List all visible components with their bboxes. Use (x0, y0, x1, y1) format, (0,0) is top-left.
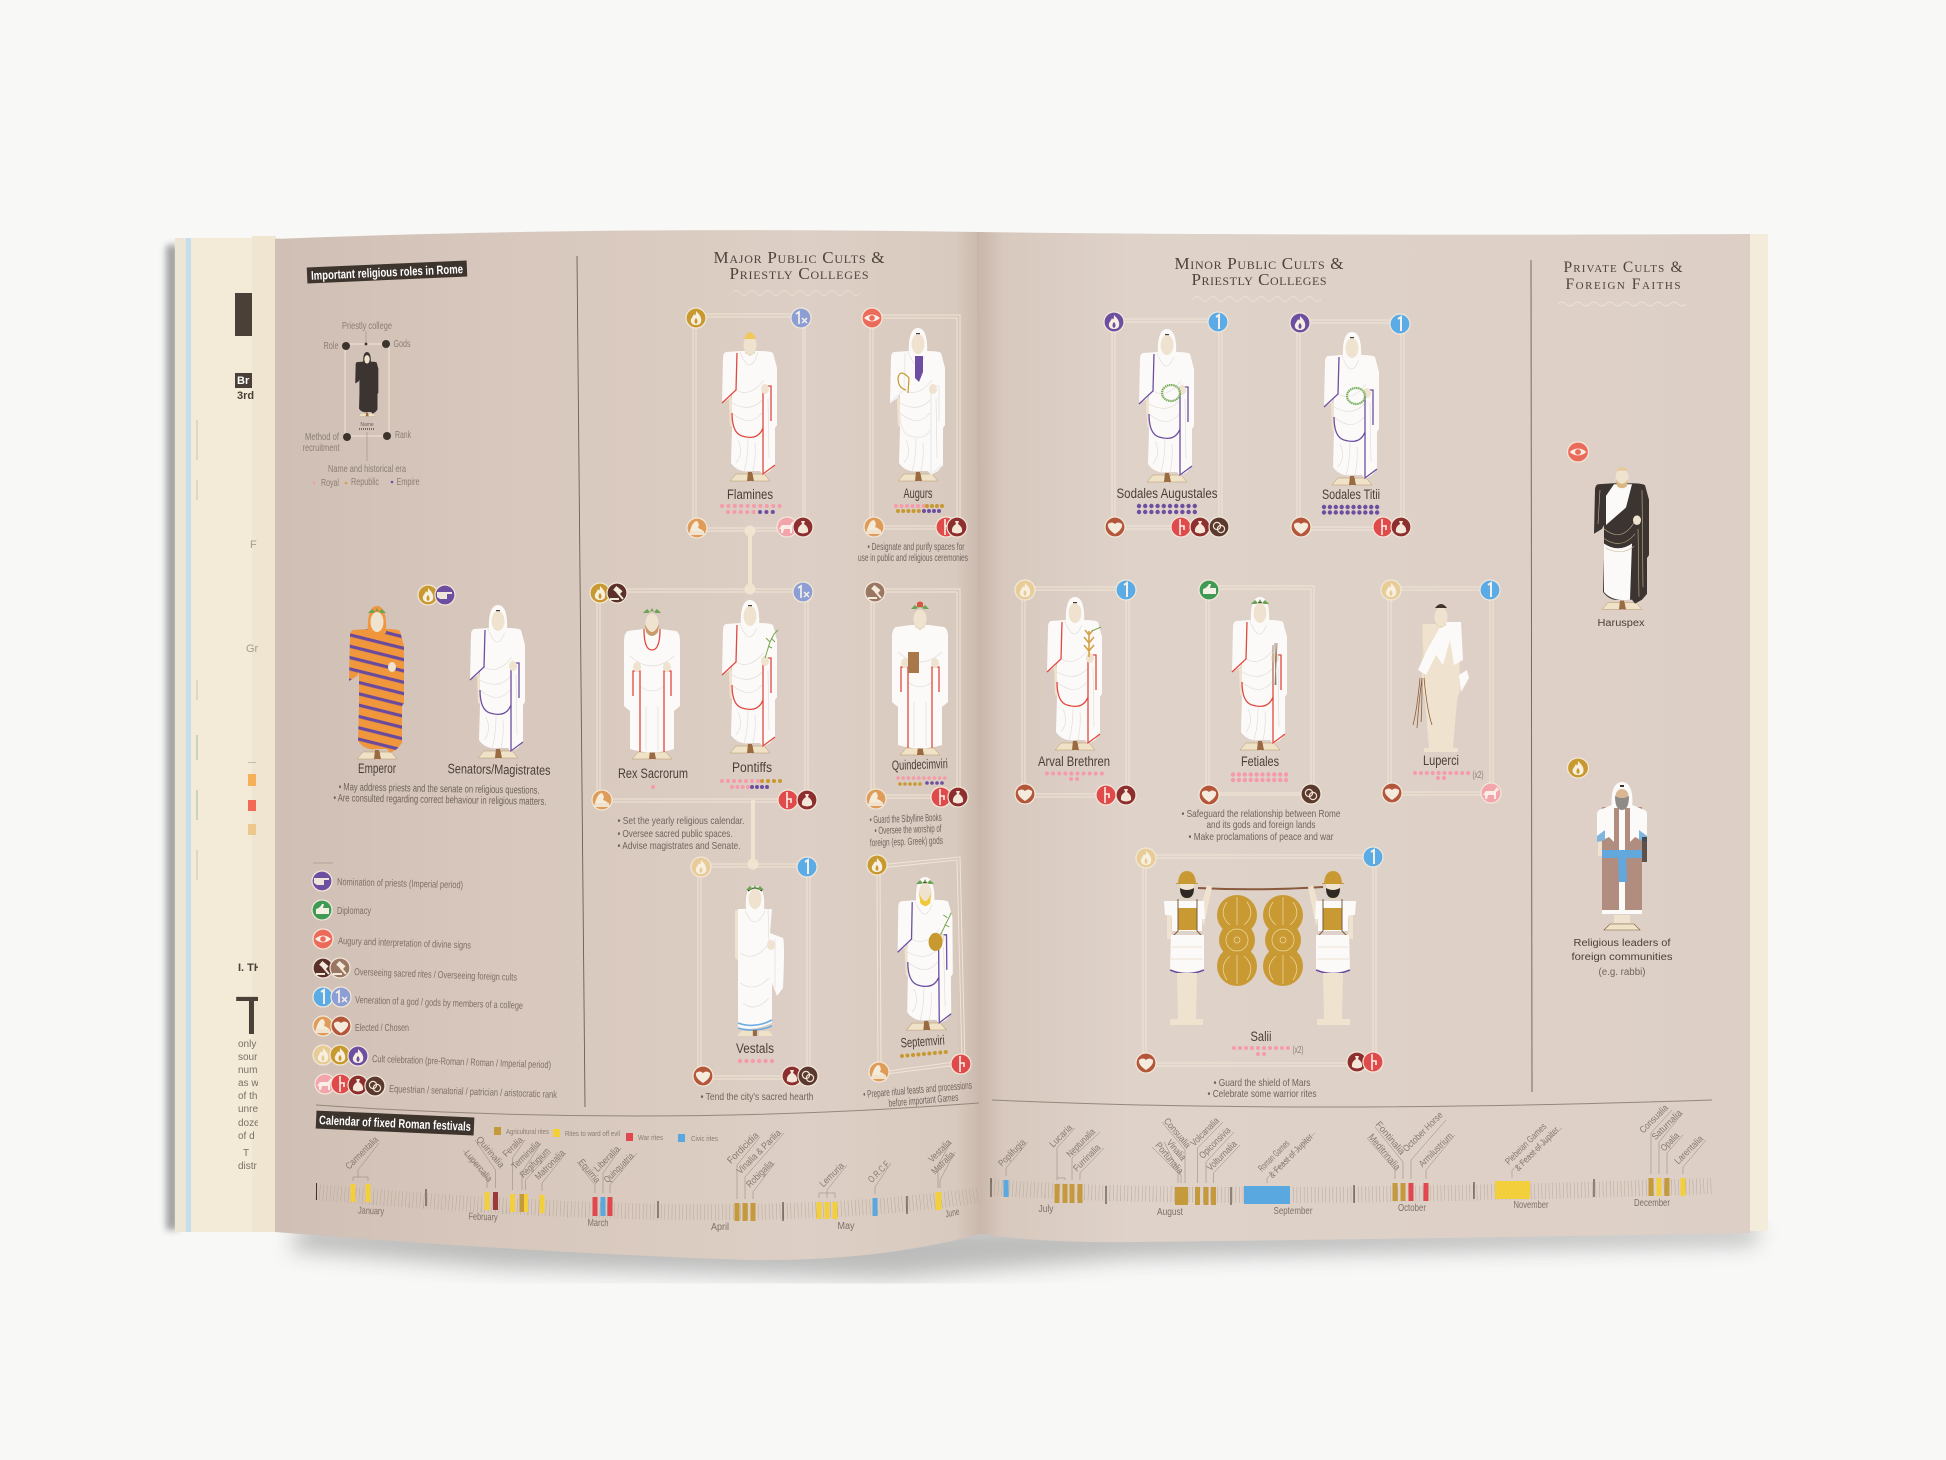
festival names: Consualia (1161, 1116, 1193, 1151)
era dots (896, 506, 943, 511)
figure (1047, 597, 1102, 750)
panel: Sodales Augustales (1104, 312, 1229, 537)
legend row: nomination: Nomination of priests (Imperial period) (337, 877, 463, 891)
festival names: Vinalia & Parilia (735, 1127, 784, 1177)
calendar title (316, 1111, 474, 1135)
festival bars (1004, 1178, 1686, 1205)
description: before important Games (888, 1092, 959, 1110)
festival names: Portunalia (1152, 1140, 1186, 1177)
legend row: overseeing (313, 958, 517, 984)
era dots (1234, 1048, 1289, 1054)
previous page fragments: T (235, 986, 268, 1046)
figure: Emperor (349, 606, 404, 759)
festival names: Poplifugia (996, 1137, 1029, 1169)
icons (1104, 312, 1229, 537)
festival names: Volturnalia (1205, 1138, 1240, 1174)
panel: Religious leaders (1568, 758, 1672, 978)
calendar timeline: January to June (316, 1127, 979, 1233)
description: • Safeguard the relationship between Rome (1182, 808, 1341, 820)
previous page fragments: distr (238, 1161, 258, 1172)
frame (1388, 587, 1493, 795)
role key diagram: Gods (394, 339, 410, 350)
month labels: July (1038, 1204, 1054, 1215)
festival names: Furrinalia (1071, 1142, 1104, 1174)
era dots (1415, 773, 1469, 778)
icons (590, 582, 817, 810)
role key diagram (302, 321, 420, 489)
festival names: Regifugium (518, 1146, 553, 1181)
era dots (651, 781, 782, 789)
description: • Advise magistrates and Senate. (618, 840, 740, 852)
key figure (355, 352, 378, 416)
legend row: augury: Augury and interpretation of divine signs (338, 936, 471, 952)
festival names: Opiconsivia (1197, 1125, 1234, 1161)
day ticks (991, 1186, 1712, 1195)
festival names: Carmentalia (343, 1134, 381, 1172)
description (858, 541, 968, 564)
previous page fragments: Br (237, 375, 250, 387)
month labels: October (1398, 1203, 1427, 1214)
name: foreign communities (1572, 952, 1672, 963)
previous page fragments: sour (238, 1052, 258, 1063)
frame (597, 589, 808, 802)
name: (e.g. rabbi) (1598, 967, 1646, 978)
description (333, 781, 547, 808)
previous page fragments: doze (238, 1118, 260, 1129)
legend row: augury (313, 929, 471, 952)
description (869, 812, 943, 849)
panel: Septemviri (863, 855, 973, 1112)
month labels (358, 1206, 961, 1233)
month labels: April (711, 1222, 729, 1233)
icons (1290, 313, 1411, 537)
figure: Pontiff (722, 600, 778, 753)
calendar legend: Agricultural rites (506, 1129, 549, 1136)
figure (1413, 604, 1469, 752)
name: Senators: Senators/Magistrates (447, 761, 551, 778)
previous page fragments (235, 293, 258, 1169)
legend row: diplomacy (312, 900, 371, 920)
frame (870, 315, 960, 529)
name: Salii (1250, 1029, 1272, 1044)
era dots (1139, 506, 1196, 512)
left page (275, 230, 983, 1260)
era dots (740, 1059, 773, 1063)
figure (722, 332, 777, 481)
previous page fragments: T (243, 1148, 249, 1159)
previous page fragments: only (238, 1039, 256, 1050)
role key diagram: Name (360, 422, 374, 428)
role key diagram: Priestly college (342, 321, 392, 332)
frame (693, 314, 805, 531)
description: • Tend the city's sacred hearth (700, 1091, 814, 1103)
festival names: October Horse (1401, 1110, 1446, 1155)
festival names (996, 1102, 1706, 1181)
icon: nomination (435, 585, 455, 605)
figure (897, 877, 953, 1030)
festival names: Opalia (1659, 1130, 1682, 1154)
icons (686, 308, 813, 538)
era dots (902, 1052, 946, 1056)
role key diagram: Role (324, 341, 339, 352)
panel: Sodales Titii (1290, 313, 1411, 537)
festival names: Consualia (1638, 1102, 1671, 1136)
previous page fragments: 3rd (237, 390, 254, 402)
legend row: nomination (312, 871, 463, 891)
panel: Salii (1136, 847, 1383, 1100)
name: Flamines (727, 487, 773, 502)
icons (1136, 847, 1383, 1073)
festival bars (350, 1184, 942, 1221)
name: Septemviri (900, 1032, 945, 1051)
icons (1381, 580, 1501, 803)
festival names: Matronalia (533, 1147, 568, 1183)
description: • Prepare ritual feasts and processions (863, 1079, 972, 1101)
panel: Vestals (691, 857, 818, 1103)
book shadow (290, 1225, 1760, 1278)
panel: Augurs (858, 308, 968, 564)
month labels: September (1274, 1206, 1313, 1217)
name: Augurs (904, 486, 933, 501)
figure (1594, 467, 1649, 609)
name: Quindecimviri (892, 756, 948, 773)
festival names: Plebeian Games (1503, 1121, 1549, 1167)
month labels: March (587, 1218, 609, 1229)
figure (890, 328, 945, 481)
name: Rex Sacrorum: Rex Sacrorum (618, 766, 688, 781)
era dots (1324, 507, 1378, 512)
frame (1206, 586, 1314, 795)
festival names: Saturnalia (1650, 1107, 1685, 1143)
festival names: Feralia (501, 1134, 526, 1160)
month labels: August (1157, 1207, 1183, 1218)
festival names: Robigalia (744, 1158, 777, 1190)
festival names: Lucaria (1047, 1122, 1075, 1150)
figure: right warrior (1308, 871, 1356, 1025)
icons (1199, 580, 1321, 805)
role key diagram: Method of (305, 432, 339, 443)
previous page fragments: Gr (246, 643, 259, 655)
previous page fragments: as w (238, 1078, 259, 1089)
name: Emperor: Emperor (358, 761, 396, 776)
description (618, 815, 744, 852)
era dots (1233, 774, 1288, 780)
panel: Quindecimviri (865, 582, 968, 849)
icons (865, 582, 968, 809)
festival names: Quirinalia (473, 1134, 507, 1171)
book page edges: left block (175, 236, 280, 1232)
previous page fragments: of d (238, 1131, 255, 1142)
heading: minor public cults (1174, 254, 1344, 302)
figure (892, 602, 948, 755)
section title: important roles: Important religious roles in Rome (311, 262, 463, 283)
previous page fragments: of th (238, 1091, 257, 1102)
previous page fragments: unre (238, 1104, 258, 1115)
name: Arval Brethren (1038, 754, 1110, 769)
day ticks (316, 1192, 979, 1212)
month separators (991, 1178, 1594, 1205)
month labels: January (358, 1206, 384, 1217)
role key diagram: Empire (396, 477, 420, 488)
right cream page edge (1740, 234, 1768, 1231)
figure: left warrior (1164, 871, 1212, 1025)
month labels: December (1634, 1198, 1671, 1209)
festival names: Terminalia (510, 1138, 543, 1172)
frame (1112, 319, 1222, 529)
description: • Oversee sacred public spaces. (618, 828, 732, 840)
connectors (1006, 1110, 1706, 1183)
calendar title: Calendar of fixed Roman festivals (319, 1113, 471, 1134)
panel: Flamines (686, 308, 813, 538)
name: Sodales Titii (1322, 487, 1380, 502)
role key diagram: Rank (395, 430, 412, 441)
icon legend (312, 863, 558, 1101)
icons (1015, 580, 1136, 805)
heading: minor public cults: Minor Public Cults & (1174, 254, 1344, 273)
shields (1217, 895, 1303, 986)
month labels: June (944, 1207, 961, 1220)
heading: private cults: Private Cults & (1564, 259, 1682, 276)
description: • Are consulted regarding correct behaviour in religious matters. (333, 792, 547, 808)
frame (1297, 320, 1404, 530)
festival names: Vestalia (926, 1137, 954, 1165)
description: • Make proclamations of peace and war (1188, 831, 1334, 843)
panel: Rex Sacrorum and Pontiffs (590, 582, 817, 852)
figure: Rex (624, 608, 680, 759)
calendar timeline: July to December (991, 1102, 1712, 1218)
legend row: cult (313, 1045, 551, 1071)
month labels: February (468, 1211, 498, 1224)
festival names: Fordicidia (725, 1130, 762, 1166)
heading: private cults: Foreign Faiths (1566, 276, 1680, 293)
legend row: veneration: Veneration of a god / gods by members of a college (355, 995, 523, 1012)
description (1208, 1077, 1316, 1100)
description: and its gods and foreign lands (1206, 819, 1316, 831)
heading: major public cults: Priestly Colleges (730, 264, 868, 283)
era dots (898, 778, 945, 784)
figure: Senators (470, 605, 525, 758)
description: • Celebrate some warrior rites (1208, 1088, 1316, 1100)
role key diagram: Name and historical era (328, 464, 406, 475)
frame (698, 864, 810, 1079)
description: • Set the yearly religious calendar. (618, 815, 744, 827)
previous page fragments: I. TH (238, 962, 262, 974)
frame (871, 589, 960, 798)
legend row: elected: Elected / Chosen (355, 1023, 409, 1034)
panel: Arval Brethren (1015, 580, 1136, 805)
description: use in public and religious ceremonies (858, 552, 968, 564)
connectors (353, 1133, 955, 1199)
name: Vestals (736, 1041, 774, 1056)
month labels: November (1514, 1200, 1549, 1211)
calendar legend: Rites to ward off evil (565, 1131, 620, 1138)
figure (735, 885, 784, 1036)
legend row: overseeing: Overseeing sacred rites / Overseeing foreign cults (354, 967, 517, 984)
pole (1198, 887, 1323, 889)
role key diagram: recruitment (302, 443, 340, 454)
festival names: & Feast of Jupiter (1267, 1132, 1316, 1181)
name: Fetiales (1241, 754, 1279, 769)
name: Haruspex (1598, 618, 1644, 629)
icons (867, 855, 971, 1082)
festival names: Fontinalia (1373, 1120, 1407, 1158)
heading: private cults (1558, 259, 1686, 306)
previous page fragments: F (250, 539, 257, 551)
icons (862, 308, 967, 537)
column dividers (577, 256, 1532, 1107)
month labels: May (838, 1221, 854, 1232)
figure (1597, 782, 1647, 930)
festival names: Equirria (576, 1157, 603, 1186)
festival names: Quinquatria (602, 1151, 637, 1186)
month labels (1038, 1198, 1671, 1218)
legend row: cult: Cult celebration (pre-Roman / Roman / Imperial period) (372, 1054, 551, 1071)
festival names: Larentalia (1673, 1133, 1706, 1167)
festival names: Vinalia (1164, 1138, 1188, 1164)
festival names: Lupercalia (461, 1148, 495, 1185)
description: • Guard the Sibylline Books (869, 812, 942, 826)
description: • Oversee the worship of (874, 823, 942, 837)
previous page fragments: num (238, 1065, 257, 1076)
left edge shadow (166, 245, 178, 1230)
description: foreign (esp. Greek) gods (870, 835, 943, 849)
panel: Haruspex (1568, 442, 1649, 629)
festival names: & Feast of Jupiter (1513, 1125, 1562, 1174)
calendar legend: Civic rites (691, 1136, 718, 1143)
name: Pontiffs: Pontiffs (732, 760, 772, 775)
frame (1143, 855, 1376, 1066)
figure (1232, 597, 1287, 750)
festival names: Matralia (929, 1149, 957, 1177)
frame (1022, 587, 1129, 797)
panel: Fetiales (1182, 580, 1341, 843)
festival names: Lemuria (818, 1160, 847, 1190)
right page (977, 232, 1750, 1242)
calendar legend (494, 1127, 718, 1143)
era dots (722, 506, 781, 512)
legend row: rank: Equestrian / senatorial / patrician / aristocratic rank (389, 1084, 558, 1101)
heading: major public cults (714, 248, 884, 296)
icons (691, 857, 818, 1086)
description (863, 1079, 973, 1112)
figure (1324, 332, 1379, 485)
festival names: O.R.C.F (866, 1159, 892, 1185)
figure (1139, 329, 1194, 482)
calendar legend: War rites (638, 1135, 663, 1142)
name: Sodales Augustales (1116, 486, 1218, 501)
icon: cult (1568, 758, 1588, 778)
icon: augury (1568, 442, 1588, 462)
multiplier: (x2) (1472, 770, 1484, 781)
legend row: veneration (313, 987, 523, 1012)
festival names: Liberalia (592, 1144, 623, 1174)
panel: Luperci (1381, 580, 1501, 803)
description: • Designate and purify spaces for (868, 541, 965, 553)
festival names: Armilustrium (1417, 1131, 1456, 1170)
heading: minor public cults: Priestly Colleges (1192, 270, 1326, 289)
festival names: Roman Games (1256, 1138, 1292, 1174)
legend row: rank (315, 1074, 558, 1101)
era dots (1047, 774, 1103, 779)
connector: Flamines to Pontiffs to Vestals (744, 526, 758, 870)
role key diagram: Republic (351, 477, 379, 488)
role key diagram: Royal (321, 478, 339, 489)
festival names: Volcanalia (1189, 1115, 1222, 1149)
description (1182, 808, 1341, 843)
frame (877, 857, 965, 1075)
heading: major public cults: Major Public Cults & (714, 248, 884, 267)
panel: Emperor and Senators (333, 585, 551, 808)
name: Luperci (1423, 753, 1459, 768)
icon: pre-roman cult (418, 585, 438, 605)
name (1572, 938, 1672, 978)
name: Religious leaders of (1574, 938, 1671, 949)
description: • Guard the shield of Mars (1214, 1077, 1310, 1089)
legend row: elected (313, 1016, 409, 1036)
festival names: Meditrinalia (1366, 1132, 1403, 1173)
festival names (343, 1127, 957, 1190)
legend row: diplomacy: Diplomacy (337, 906, 371, 917)
festival names: Neptunalia (1065, 1126, 1098, 1160)
calendar dividers (316, 1100, 1712, 1116)
multiplier: (x2) (1292, 1045, 1304, 1056)
month separators (316, 1183, 907, 1221)
description: • May address priests and the senate on religious questions. (339, 781, 540, 797)
